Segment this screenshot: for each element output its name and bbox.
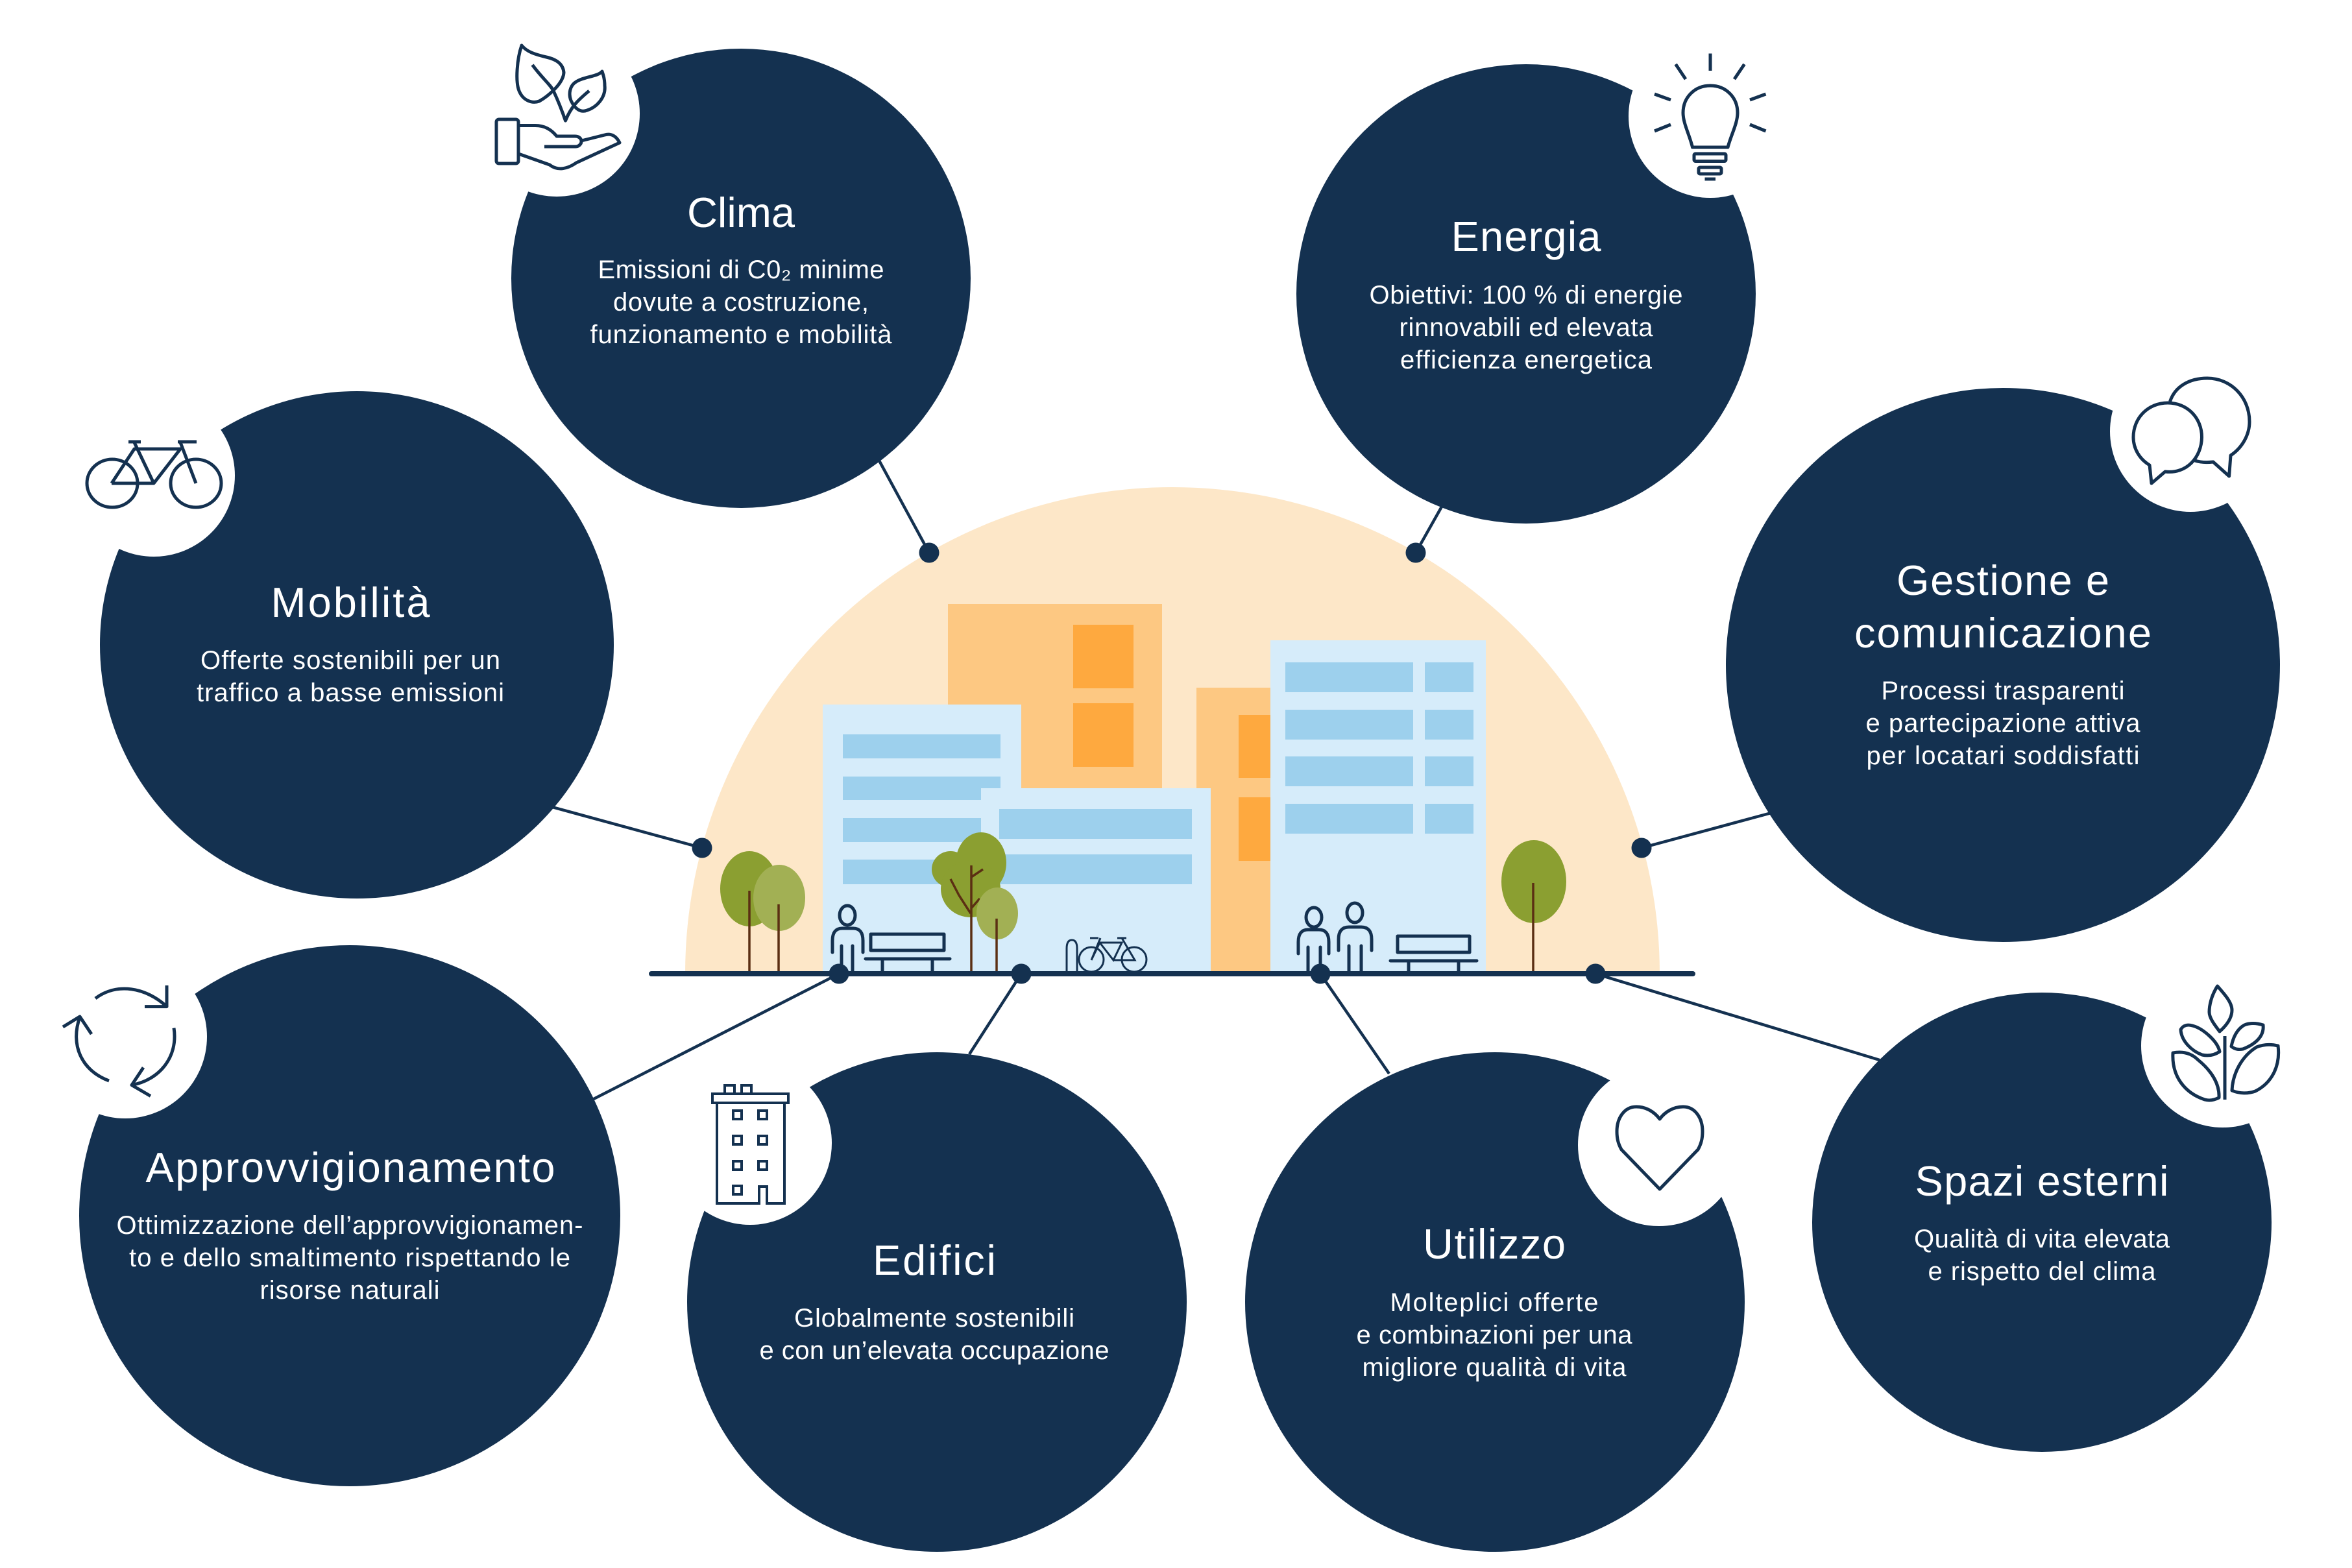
heading: Clima: Clima xyxy=(687,189,795,236)
body: Energia xyxy=(1369,281,1683,374)
body: Approvvigionamento: Ottimizzazione dell’approvvigionamen- xyxy=(117,1211,583,1240)
body: Mobilità xyxy=(197,646,504,707)
icon: apartment building xyxy=(712,1085,788,1203)
orange building right xyxy=(1196,688,1274,974)
body: Approvvigionamento xyxy=(117,1211,583,1305)
bench right xyxy=(1390,936,1477,974)
two people right xyxy=(1298,903,1372,974)
icon: speech bubbles xyxy=(2133,378,2249,483)
body: Gestione: Processi trasparenti xyxy=(1882,677,2124,705)
connector lines and dots xyxy=(552,461,1880,1100)
body: Approvvigionamento: risorse naturali xyxy=(260,1276,440,1305)
blue building centre xyxy=(981,788,1211,974)
body: Spazi esterni: Qualità di vita elevata xyxy=(1914,1225,2170,1253)
heading: Gestione e comunicazione xyxy=(1854,557,2152,657)
icon: plant in hand xyxy=(496,45,620,169)
body: Utilizzo xyxy=(1356,1288,1632,1382)
heading: Approvvigionamento: Approvvigionamento xyxy=(145,1144,555,1191)
person left xyxy=(832,906,863,974)
heading: Spazi esterni: Spazi esterni xyxy=(1915,1157,2168,1205)
blue building left xyxy=(823,705,1021,974)
body: Edifici: Globalmente sostenibili xyxy=(794,1304,1074,1333)
body: Gestione: per locatari soddisfatti xyxy=(1866,742,2140,770)
tree cluster centre xyxy=(932,832,1018,974)
panel: Spazi esterni xyxy=(1812,964,2305,1452)
body: Energia: Obiettivi: 100 % di energie xyxy=(1369,281,1683,309)
heading: Mobilità: Mobilità xyxy=(271,579,430,626)
panel: Clima xyxy=(474,30,971,508)
body: Clima: Emissioni di C0₂ minime xyxy=(598,256,884,284)
icon: leafy sprig xyxy=(2173,986,2279,1100)
icon: light bulb xyxy=(1655,53,1766,179)
central illustration: neighbourhood xyxy=(649,487,1695,976)
body: Mobilità: Offerte sostenibili per un xyxy=(200,646,500,675)
icon: heart xyxy=(1617,1107,1703,1189)
bicycle and rack xyxy=(1067,938,1146,974)
body: Gestione xyxy=(1866,677,2140,770)
trees left xyxy=(720,851,805,974)
tree right xyxy=(1501,840,1566,974)
icon: bicycle xyxy=(87,442,221,507)
body: Spazi esterni xyxy=(1914,1225,2170,1286)
panel: Gestione e comunicazione xyxy=(1726,351,2280,942)
heading: Gestione e comunicazione: comunicazione xyxy=(1854,609,2152,657)
body: Edifici: e con un’elevata occupazione xyxy=(759,1336,1109,1365)
orange building left xyxy=(948,604,1162,974)
body: Energia: rinnovabili ed elevata xyxy=(1399,313,1653,342)
heading: Utilizzo: Utilizzo xyxy=(1423,1220,1566,1268)
body: Utilizzo: migliore qualità di vita xyxy=(1363,1353,1627,1382)
body: Spazi esterni: e rispetto del clima xyxy=(1928,1257,2156,1286)
icon: recycling arrows xyxy=(63,985,175,1096)
panel: Energia xyxy=(1296,34,1792,524)
body: Clima xyxy=(590,256,892,349)
dome xyxy=(685,487,1660,974)
heading: Energia: Energia xyxy=(1451,213,1601,260)
body: Clima: funzionamento e mobilità xyxy=(590,320,892,349)
body: Utilizzo: e combinazioni per una xyxy=(1356,1321,1632,1349)
bench left xyxy=(866,934,950,974)
panel: Mobilità xyxy=(73,391,614,899)
body: Mobilità: traffico a basse emissioni xyxy=(197,679,504,707)
body: Gestione: e partecipazione attiva xyxy=(1866,709,2140,738)
blue building right xyxy=(1270,640,1486,974)
body: Approvvigionamento: to e dello smaltimento rispettando le xyxy=(129,1244,570,1272)
body: Edifici xyxy=(759,1304,1109,1365)
panel: Approvvigionamento xyxy=(43,945,620,1486)
panel: Utilizzo xyxy=(1245,1052,1745,1552)
ground line xyxy=(649,971,1695,976)
body: Utilizzo: Molteplici offerte xyxy=(1390,1288,1599,1317)
heading: Gestione e comunicazione: Gestione e xyxy=(1897,557,2109,604)
panel: Edifici xyxy=(668,1052,1187,1552)
body: Clima: dovute a costruzione, xyxy=(613,288,869,317)
body: Energia: efficienza energetica xyxy=(1400,346,1653,374)
heading: Edifici: Edifici xyxy=(873,1236,996,1284)
